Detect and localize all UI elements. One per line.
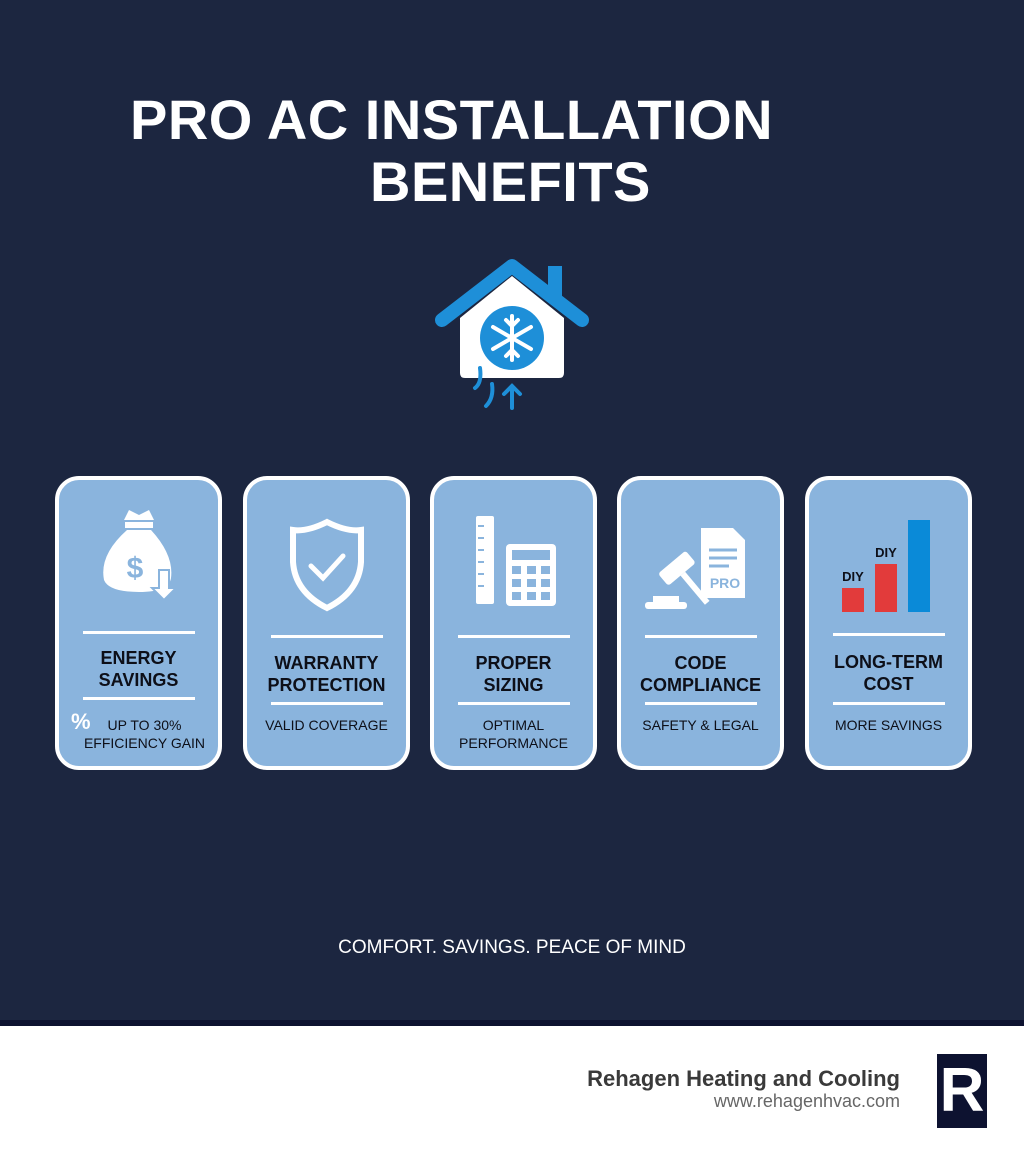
title bbox=[130, 88, 773, 213]
title: BENEFITS bbox=[370, 150, 651, 213]
footer bbox=[0, 1020, 1024, 1154]
icon: money bag: $ bbox=[127, 552, 144, 585]
icon: ruler and calculator bbox=[476, 516, 556, 606]
panel: proper sizing: OPTIMAL bbox=[483, 717, 544, 733]
panel: energy savings: % bbox=[71, 709, 91, 734]
icon: gavel and document: PRO bbox=[710, 575, 740, 591]
icon: money bag bbox=[103, 510, 174, 598]
panel: warranty protection: PROTECTION bbox=[267, 675, 386, 695]
panel: warranty protection: WARRANTY bbox=[274, 653, 378, 673]
panel: proper sizing: PROPER bbox=[475, 653, 552, 673]
logo: R bbox=[940, 1056, 984, 1125]
panel: long-term cost: COST bbox=[863, 674, 914, 694]
icon: house with snowflake bbox=[435, 259, 589, 410]
icon: bar chart bbox=[842, 520, 930, 612]
panel: warranty protection bbox=[243, 476, 410, 770]
panel: proper sizing bbox=[430, 476, 597, 770]
panel: energy savings: UP TO 30% bbox=[108, 717, 181, 733]
panel: energy savings: EFFICIENCY GAIN bbox=[84, 735, 205, 751]
panel: energy savings: SAVINGS bbox=[99, 670, 178, 690]
icon: bar chart: DIY bbox=[875, 545, 897, 560]
panel: proper sizing: PERFORMANCE bbox=[459, 735, 568, 751]
website: www.rehagenhvac.com bbox=[714, 1091, 900, 1111]
panel: energy savings bbox=[55, 476, 222, 770]
company name: Rehagen Heating and Cooling bbox=[587, 1066, 900, 1091]
panel: long-term cost: LONG-TERM bbox=[834, 652, 943, 672]
icon: gavel and document bbox=[645, 528, 745, 609]
panel: code compliance: CODE bbox=[674, 653, 726, 673]
icon: shield bbox=[290, 518, 364, 612]
panel: warranty protection: VALID COVERAGE bbox=[265, 717, 388, 733]
panel: code compliance: COMPLIANCE bbox=[640, 675, 761, 695]
tagline: COMFORT. SAVINGS. PEACE OF MIND bbox=[338, 937, 686, 958]
panel: proper sizing: SIZING bbox=[483, 675, 544, 695]
panel: energy savings: ENERGY bbox=[100, 648, 177, 668]
panel: code compliance bbox=[617, 476, 784, 770]
panel: long-term cost bbox=[805, 476, 972, 770]
title: PRO AC INSTALLATION bbox=[130, 88, 773, 151]
panel: long-term cost: MORE SAVINGS bbox=[835, 717, 942, 733]
panel: code compliance: SAFETY & LEGAL bbox=[642, 717, 759, 733]
icon: bar chart: DIY bbox=[842, 569, 864, 584]
